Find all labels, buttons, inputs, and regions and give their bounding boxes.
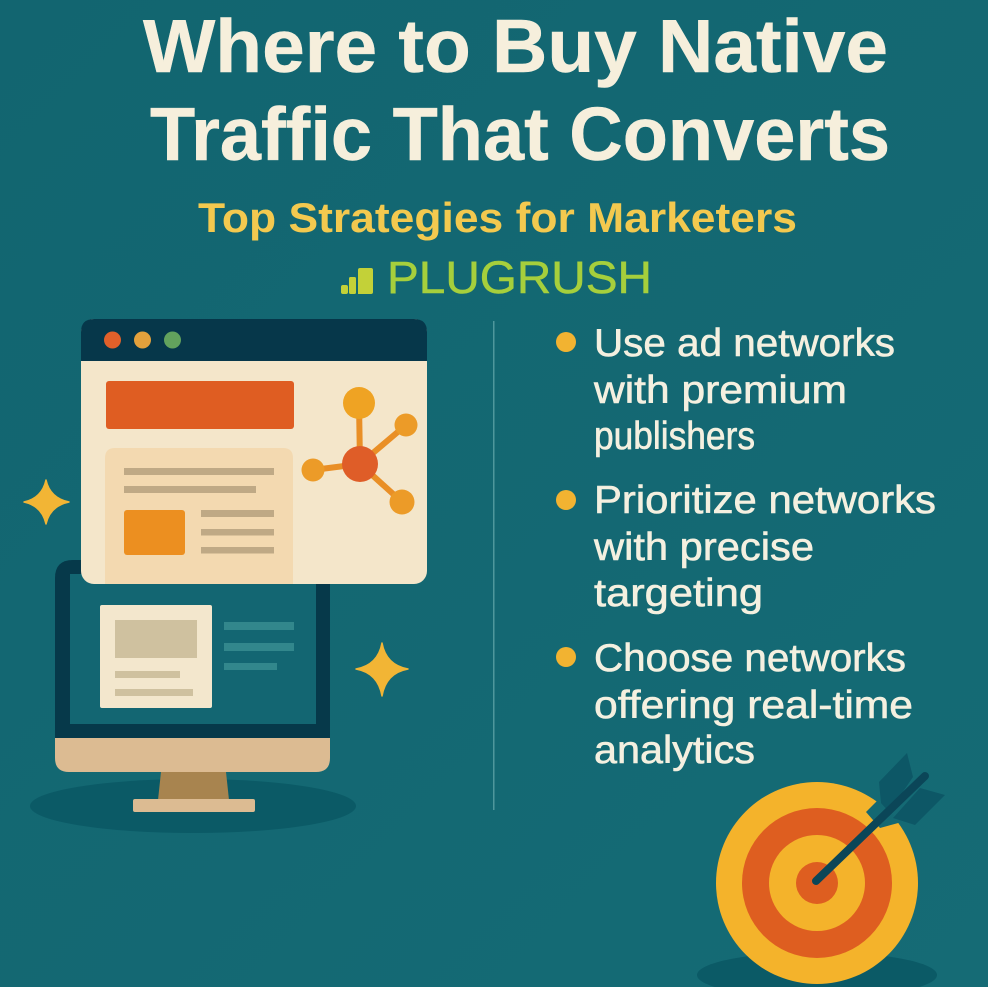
screen text lines <box>224 622 294 670</box>
arrow fletching <box>879 753 945 825</box>
bullet 3: analytics <box>594 729 755 772</box>
target notch behind the arrow <box>866 800 902 828</box>
bullet 1: publishers <box>594 415 755 458</box>
icon: sparkle left <box>24 480 69 524</box>
monitor chin <box>55 738 330 772</box>
monitor base <box>133 799 255 812</box>
title: Where to Buy Native <box>143 4 888 88</box>
target shadow <box>697 952 937 987</box>
target rings <box>716 782 918 984</box>
illustration: computer monitor <box>30 560 356 833</box>
monitor bezel <box>55 560 330 739</box>
bullet 3: Choose networks <box>594 637 906 680</box>
bullet 3: offering real-time <box>594 684 913 727</box>
title: Traffic That Converts <box>150 92 890 176</box>
bullet 3 <box>556 637 913 772</box>
bullet 1: with premium <box>593 369 847 412</box>
bullet list <box>556 322 936 772</box>
logo wordmark: PLUGRUSH <box>387 252 652 303</box>
icon: target with arrow <box>697 753 945 987</box>
bullet 1: Use ad networks <box>594 322 895 365</box>
monitor stand <box>158 772 229 800</box>
title <box>143 4 890 176</box>
bullet 2: targeting <box>594 572 763 615</box>
icon: logo bars <box>341 268 373 294</box>
browser page <box>81 319 427 584</box>
bullet 2: Prioritize networks <box>594 479 936 522</box>
icon: sparkle right <box>356 643 408 696</box>
bullet 2: with precise <box>593 526 814 569</box>
orange banner <box>106 381 294 429</box>
monitor screen <box>70 574 316 724</box>
logo: PlugRush <box>341 252 652 303</box>
monitor shadow <box>30 779 356 833</box>
window dots <box>104 332 181 348</box>
bullet 2 <box>556 479 936 615</box>
illustration: browser window <box>81 319 427 584</box>
arrow shaft <box>816 776 925 881</box>
screen card <box>100 605 212 708</box>
bullet 1 <box>556 322 895 458</box>
browser title bar <box>81 319 427 361</box>
native ad card <box>105 448 293 584</box>
network diagram <box>302 387 418 514</box>
subtitle: Top Strategies for Marketers <box>198 194 797 241</box>
vertical divider <box>493 321 494 810</box>
